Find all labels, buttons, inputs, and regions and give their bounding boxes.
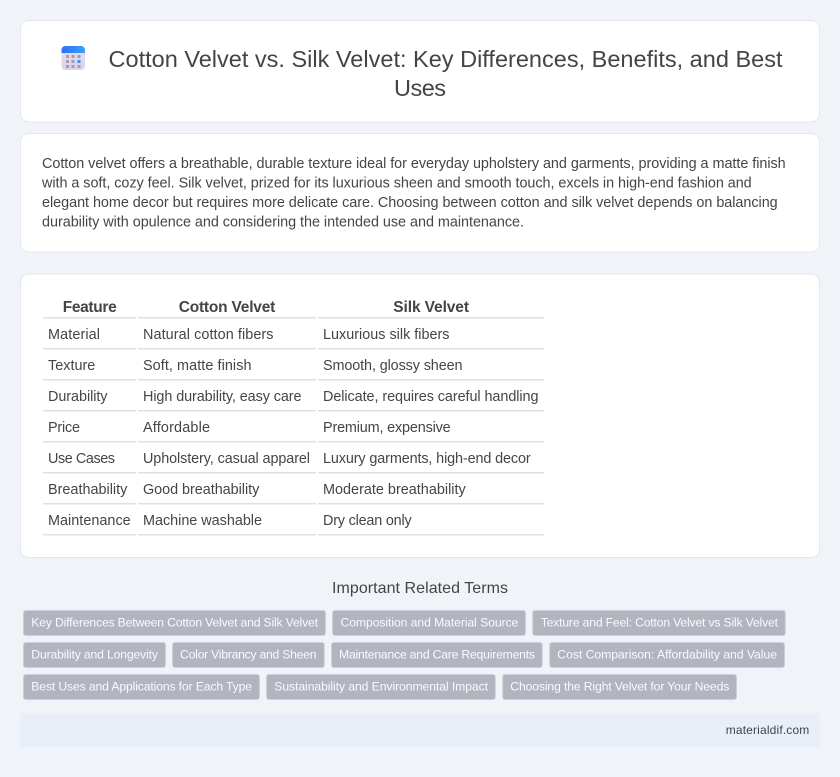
text block: introduction paragraph: Cotton velvet offers a breathable, durable texture ideal for everyday upholstery and garments, providing a matte finish bbox=[42, 156, 786, 172]
tag: cost comparison bbox=[550, 642, 784, 668]
text block: introduction paragraph: elegant home decor but requires more delicate care. Choosing between cotton and silk velvet depends on balancing bbox=[42, 195, 778, 211]
table row: maintenance: Maintenance bbox=[48, 513, 131, 529]
table row: durability: High durability, easy care bbox=[143, 389, 302, 405]
table header row: Silk Velvet bbox=[393, 299, 469, 316]
tag: cost comparison: Cost Comparison: Affordability and Value bbox=[557, 648, 777, 662]
table row: use cases: Luxury garments, high-end decor bbox=[323, 451, 531, 467]
table row: maintenance: Machine washable bbox=[143, 513, 262, 529]
table row: breathability bbox=[43, 482, 544, 504]
panel: title card bbox=[20, 20, 820, 122]
table row: material: Natural cotton fibers bbox=[143, 327, 274, 343]
text block: introduction paragraph: durability with opulence and considering the intended use and maintenance. bbox=[42, 214, 524, 230]
table row: durability: Durability bbox=[48, 389, 108, 405]
table row: texture: Smooth, glossy sheen bbox=[323, 358, 462, 374]
tag: composition: Composition and Material Source bbox=[340, 616, 519, 630]
table row: material: Material bbox=[48, 327, 100, 343]
title: Uses bbox=[394, 75, 446, 101]
tag: choosing velvet bbox=[503, 674, 736, 700]
tag: composition bbox=[332, 610, 526, 636]
text block: introduction paragraph bbox=[41, 156, 786, 230]
table row: maintenance: Dry clean only bbox=[323, 513, 412, 529]
table row: price: Price bbox=[48, 420, 80, 436]
tag: best uses bbox=[24, 674, 260, 700]
tag: color vibrancy: Color Vibrancy and Sheen bbox=[180, 648, 316, 662]
table row: price: Affordable bbox=[143, 420, 210, 436]
table row: texture: Texture bbox=[48, 358, 95, 374]
panel: comparison table bbox=[20, 274, 820, 558]
icon: calendar bbox=[62, 46, 85, 70]
tag: choosing velvet: Choosing the Right Velvet for Your Needs bbox=[510, 680, 729, 694]
table row: durability bbox=[43, 389, 544, 412]
table row: use cases bbox=[43, 451, 544, 474]
table row: material bbox=[43, 327, 544, 350]
title: Cotton Velvet vs. Silk Velvet: Key Differences, Benefits, and Best bbox=[108, 46, 783, 72]
table header row: Feature bbox=[63, 299, 117, 316]
heading: important related terms: Important Related Terms bbox=[332, 580, 508, 597]
table row: price bbox=[43, 420, 544, 442]
table header row: Cotton Velvet bbox=[179, 299, 275, 316]
panel: related term tags bbox=[24, 610, 785, 700]
table row: maintenance bbox=[43, 513, 544, 536]
tag: durability bbox=[24, 642, 166, 668]
footer bar bbox=[20, 713, 820, 747]
table row: breathability: Good breathability bbox=[143, 482, 260, 498]
tag: maintenance bbox=[332, 642, 542, 668]
table row: use cases: Use Cases bbox=[48, 451, 115, 467]
tag: durability: Durability and Longevity bbox=[31, 648, 159, 662]
table row: use cases: Upholstery, casual apparel bbox=[143, 451, 310, 467]
panel: introduction bbox=[20, 134, 820, 252]
table row: durability: Delicate, requires careful handling bbox=[323, 389, 538, 405]
tag: best uses: Best Uses and Applications for Each Type bbox=[31, 680, 252, 694]
table row: texture bbox=[43, 358, 544, 380]
table header row bbox=[43, 299, 544, 318]
text block: introduction paragraph: with a soft, cozy feel. Silk velvet, prized for its luxurious sheen and smooth touch, excels in high-end fashion and bbox=[41, 176, 752, 192]
title bbox=[108, 46, 783, 101]
footer source text: materialdif.com bbox=[726, 723, 809, 737]
tag: color vibrancy bbox=[172, 642, 324, 668]
table row: material: Luxurious silk fibers bbox=[323, 327, 450, 343]
table row: breathability: Breathability bbox=[48, 482, 128, 498]
tag: key differences: Key Differences Between Cotton Velvet and Silk Velvet bbox=[31, 616, 319, 630]
tag: maintenance: Maintenance and Care Requirements bbox=[339, 648, 535, 662]
table row: texture: Soft, matte finish bbox=[143, 358, 252, 374]
tag: texture and feel bbox=[533, 610, 785, 636]
tag: sustainability bbox=[266, 674, 495, 700]
tag: sustainability: Sustainability and Environmental Impact bbox=[274, 680, 489, 694]
table row: breathability: Moderate breathability bbox=[323, 482, 466, 498]
table row: price: Premium, expensive bbox=[323, 420, 451, 436]
tag: key differences bbox=[24, 610, 326, 636]
tag: texture and feel: Texture and Feel: Cotton Velvet vs Silk Velvet bbox=[541, 616, 779, 630]
